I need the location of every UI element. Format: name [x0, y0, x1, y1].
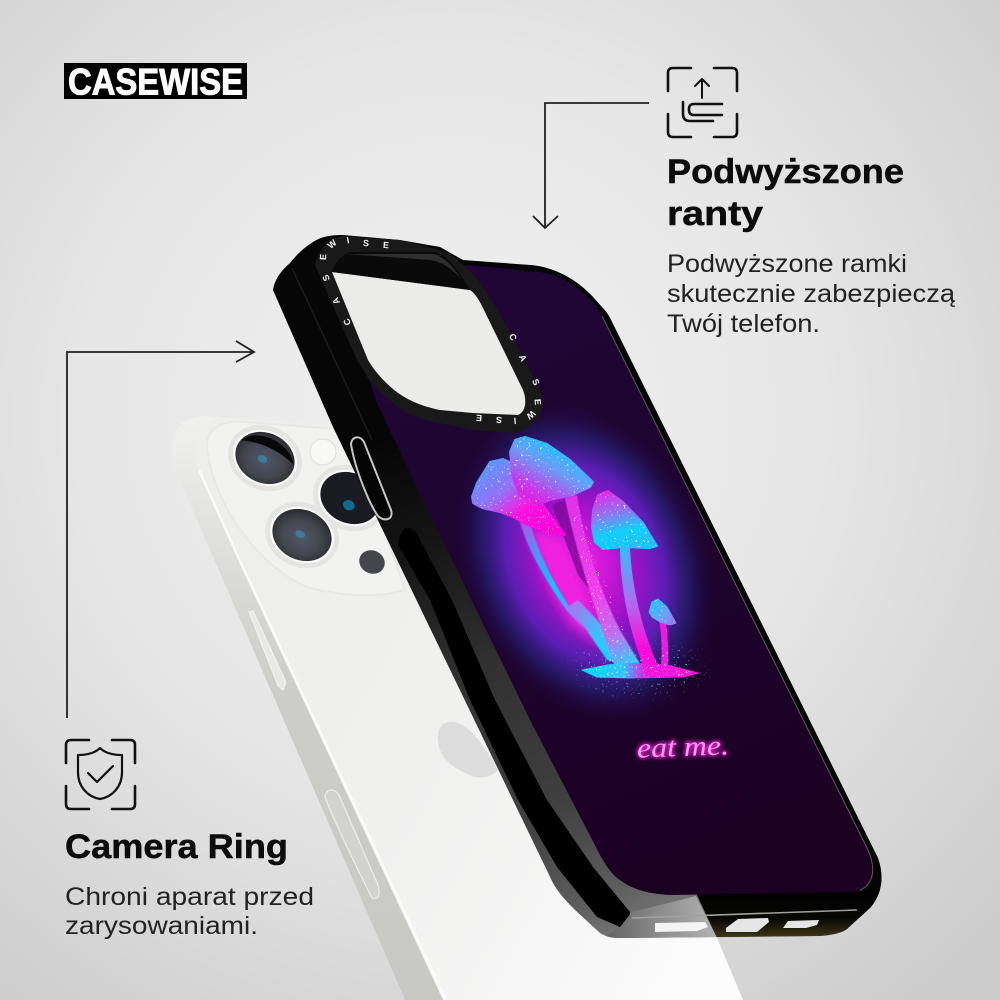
central magenta body [528, 525, 610, 650]
ring lettering: S [496, 415, 502, 425]
ring frame [315, 236, 543, 433]
lens top [217, 413, 313, 503]
heading: Podwyższone ranty: ranty [667, 195, 763, 233]
ring lettering: W [524, 408, 537, 422]
side seam [292, 268, 372, 440]
case shell [273, 235, 882, 938]
rim highlight [199, 470, 446, 1000]
icon: raised edges [668, 68, 737, 137]
flash [310, 439, 336, 465]
arrow: raised edges [533, 103, 649, 228]
ring lettering: C [507, 332, 519, 343]
screen rim light [602, 316, 873, 890]
bottom wall black part [696, 890, 880, 938]
spray around ground [566, 632, 716, 706]
ground [582, 663, 698, 678]
side slit [398, 528, 630, 927]
logo: CASEWISE: CASEWISE [68, 62, 243, 102]
text: raised edges description: Twój telefon. [667, 310, 820, 338]
icon: shield [66, 740, 135, 809]
camera module [207, 422, 405, 595]
side button [325, 790, 379, 898]
ring lettering: A [330, 295, 342, 306]
logo shadow [438, 722, 498, 778]
text: raised edges description: Podwyższone ramki [667, 250, 907, 278]
speaker port [655, 922, 708, 932]
side button [351, 437, 392, 519]
stem right [620, 546, 658, 666]
bottom highlight [632, 910, 857, 918]
black case [273, 235, 890, 940]
lens bottom [254, 490, 350, 580]
inner ring wall [332, 252, 470, 290]
ring lettering: S [530, 377, 542, 387]
ring lettering: S [320, 273, 332, 283]
screen surface [340, 265, 873, 895]
ring lettering: C [341, 316, 353, 327]
text: camera ring description [65, 883, 314, 940]
ring hole [332, 272, 525, 415]
mushroom illustration [471, 436, 716, 706]
cap left [472, 459, 565, 535]
ring lettering: A [517, 353, 529, 364]
gap shade [552, 500, 590, 590]
charge port [726, 918, 769, 932]
cap large [510, 437, 593, 505]
stem left [518, 515, 585, 630]
text: camera ring description: Chroni aparat przed [65, 883, 314, 911]
lens right [302, 453, 398, 543]
sparkle on caps [472, 438, 692, 678]
white phone [171, 413, 743, 1000]
ring lettering: I [513, 416, 517, 426]
ring lettering: W [326, 237, 339, 251]
ring lettering: I [346, 235, 350, 245]
screen artwork [340, 265, 873, 895]
dark wedge [583, 618, 612, 650]
ring lettering: E [533, 399, 543, 405]
phone back body [171, 416, 743, 1000]
mic port [783, 920, 819, 928]
ring lettering [318, 235, 543, 426]
right rim [470, 262, 882, 908]
bottom wall clear part [606, 896, 716, 938]
ring lettering: E [476, 413, 482, 423]
small sensor [355, 546, 389, 578]
bottom wall and ports [600, 890, 890, 940]
camera ring [315, 235, 543, 433]
heading: Camera Ring: Camera Ring [65, 828, 288, 866]
glow [401, 354, 769, 770]
ring lettering: E [383, 240, 389, 250]
ring lettering: S [363, 238, 369, 248]
eat me lettering: eat me. [636, 730, 729, 765]
eat me lettering: eat me. [636, 730, 729, 765]
cap right [592, 491, 657, 549]
heading: Podwyższone ranty [667, 153, 904, 233]
volume button [249, 611, 286, 690]
arrow: camera ring [67, 341, 254, 718]
stem middle [565, 495, 642, 667]
inner wall sheen [345, 254, 462, 280]
cap small [649, 599, 676, 625]
text: raised edges description [667, 250, 955, 338]
text: raised edges description: skutecznie zabezpieczą [667, 280, 955, 308]
phone side rim [171, 416, 443, 1000]
stem small [659, 621, 668, 666]
text: camera ring description: zarysowaniami. [65, 912, 258, 940]
heading: Podwyższone ranty: Podwyższone [667, 153, 904, 191]
ring lettering: E [318, 254, 328, 260]
cyan sweep [567, 600, 630, 665]
